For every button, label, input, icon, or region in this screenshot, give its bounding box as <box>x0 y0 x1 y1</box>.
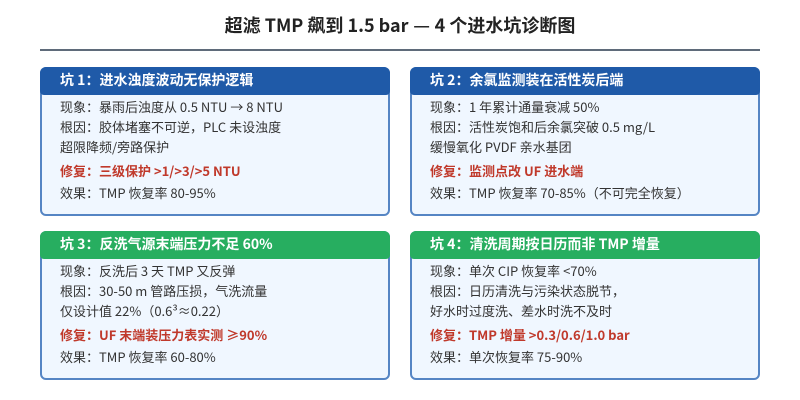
panel 1 fix: 修复：三级保护 >1/>3/>5 NTU <box>60 161 241 180</box>
panel 3 result: 效果：TMP 恢复率 60-80% <box>60 347 216 366</box>
panel 1 root cause continued: 超限降频/旁路保护 <box>60 137 169 156</box>
panel 2 result: 效果：TMP 恢复率 70-85%（不可完全恢复） <box>430 183 690 202</box>
panel 4 root cause continued: 好水时过度洗、差水时洗不及时 <box>430 301 612 320</box>
panel 4 heading: 坑 4：清洗周期按日历而非 TMP 增量 <box>430 234 660 254</box>
panel 3 fix: 修复：UF 末端装压力表实测 ≥90% <box>60 325 267 344</box>
panel 3 root cause: 根因：30-50 m 管路压损，气洗流量 <box>60 281 267 300</box>
panel: pit 1 <box>40 67 390 216</box>
panel 4 result: 效果：单次恢复率 75-90% <box>430 347 582 366</box>
panel 3 root cause continued: 仅设计值 22%（0.6³≈0.22） <box>60 301 229 320</box>
panel 2 symptom: 现象：1 年累计通量衰减 50% <box>430 97 599 116</box>
panel 3 heading: 坑 3：反洗气源末端压力不足 60% <box>60 234 273 254</box>
panel 2 heading: 坑 2：余氯监测装在活性炭后端 <box>430 70 623 90</box>
panel 4 fix: 修复：TMP 增量 >0.3/0.6/1.0 bar <box>430 325 630 344</box>
panel: pit 2 <box>410 67 760 216</box>
panel 2 fix: 修复：监测点改 UF 进水端 <box>430 161 583 180</box>
panel 2 root cause: 根因：活性炭饱和后余氯突破 0.5 mg/L <box>430 117 655 136</box>
panel 2 root cause continued: 缓慢氧化 PVDF 亲水基团 <box>430 137 572 156</box>
panel 4 symptom: 现象：单次 CIP 恢复率 <70% <box>430 261 597 280</box>
panel 4 root cause: 根因：日历清洗与污染状态脱节， <box>430 281 625 300</box>
panel 3 symptom: 现象：反洗后 3 天 TMP 又反弹 <box>60 261 235 280</box>
panel 1 symptom: 现象：暴雨后浊度从 0.5 NTU → 8 NTU <box>60 97 283 116</box>
panel 1 root cause: 根因：胶体堵塞不可逆，PLC 未设浊度 <box>60 117 281 136</box>
panel 1 result: 效果：TMP 恢复率 80-95% <box>60 183 216 202</box>
panel 1 heading: 坑 1：进水浊度波动无保护逻辑 <box>60 70 253 90</box>
panel 4 heading <box>410 231 760 259</box>
panel: pit 3 <box>40 231 390 380</box>
title: 超滤 TMP 飙到 1.5 bar — 4 个进水坑诊断图 <box>225 12 575 38</box>
panel 1 heading <box>40 67 390 95</box>
panel 3 heading <box>40 231 390 259</box>
panel: pit 4 <box>410 231 760 380</box>
panel 2 heading <box>410 67 760 95</box>
